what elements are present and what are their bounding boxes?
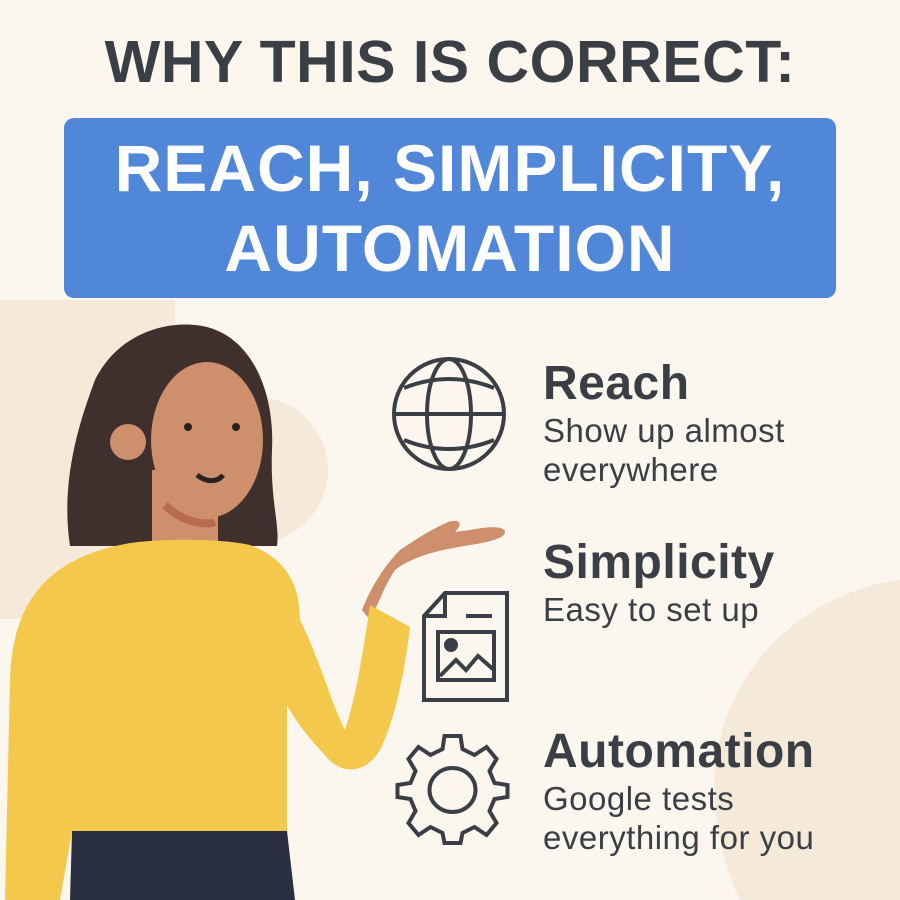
- icon: document with image: [422, 591, 509, 702]
- text: reach: Show up almost: [543, 412, 785, 449]
- text: reach: Reach: [543, 357, 690, 410]
- text: simplicity: [543, 536, 775, 628]
- pants: [70, 831, 295, 900]
- text: simplicity: Easy to set up: [543, 591, 759, 628]
- text: automation: [543, 725, 815, 856]
- text: reach: everywhere: [543, 451, 719, 488]
- text: simplicity: Simplicity: [543, 536, 775, 589]
- shirt: [5, 540, 410, 900]
- text: automation: everything for you: [543, 819, 814, 856]
- title: WHY THIS IS CORRECT:: [105, 29, 795, 95]
- neck: [152, 470, 218, 555]
- banner: AUTOMATION: [224, 211, 676, 285]
- text: automation: Automation: [543, 725, 815, 778]
- banner: [64, 118, 836, 298]
- hair: [67, 324, 278, 546]
- banner: REACH, SIMPLICITY,: [115, 131, 785, 205]
- face: [151, 362, 263, 518]
- illustration: woman: [5, 324, 505, 900]
- icon: gear: [396, 734, 510, 845]
- text: reach: [543, 357, 785, 488]
- arm and hand: [362, 521, 505, 620]
- text: automation: Google tests: [543, 780, 734, 817]
- icon: globe: [392, 357, 506, 471]
